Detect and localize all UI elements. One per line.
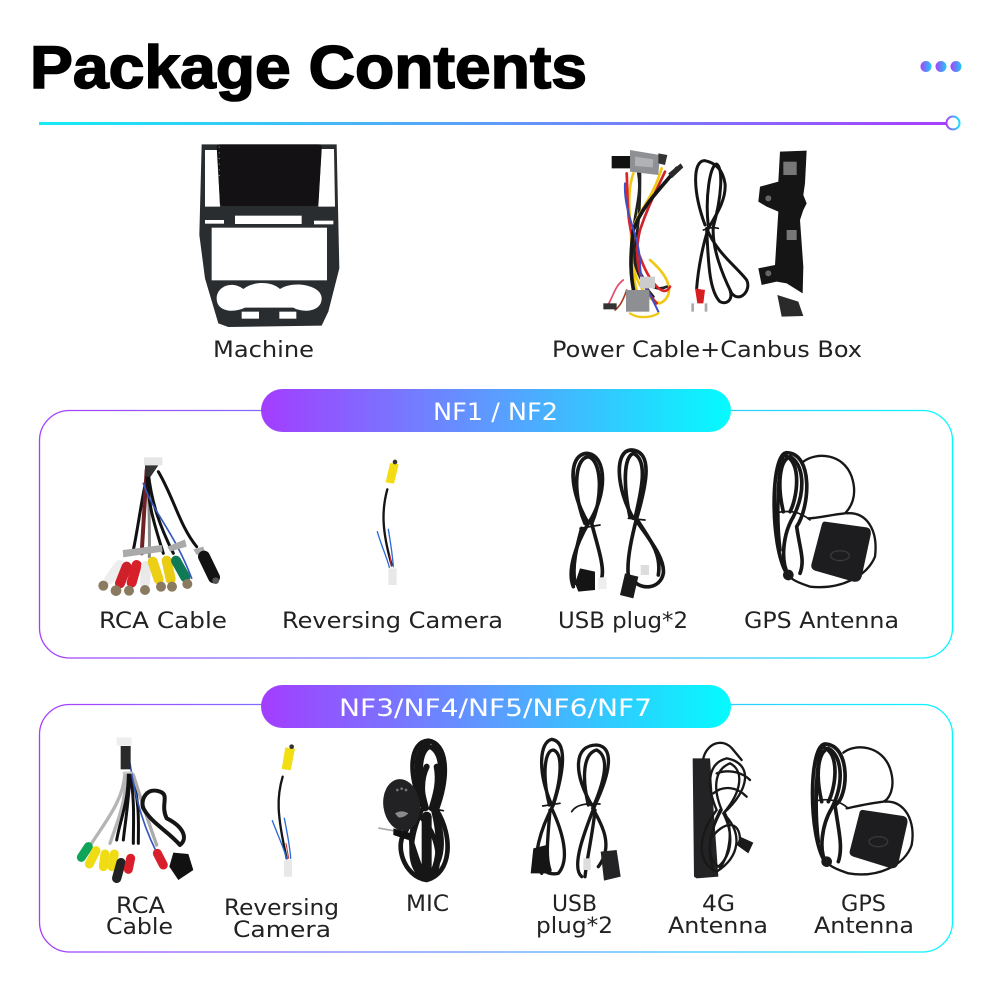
item label: RCA cable: RCA [116,894,165,919]
item label: reversing camera: Reversing [224,896,339,921]
item: RCA cable [98,457,219,596]
item: reversing camera [377,460,398,585]
item: 4G antenna [693,743,753,878]
item label: MIC: MIC [406,892,449,917]
harness wires [605,168,677,317]
item label: 4G antenna: Antenna [668,914,768,939]
item label: power cable: Power Cable+Canbus Box [552,338,862,363]
mounting bracket [758,151,807,293]
item label: reversing camera: Camera [233,918,331,943]
item: power cable, canbus box and bracket [603,150,807,317]
item: RCA cable with USB [81,737,193,880]
title: Package Contents [30,34,587,101]
item label: 4G antenna: 4G [702,892,735,917]
item label: GPS antenna [814,892,914,939]
item: microphone [378,741,448,880]
item: USB plug x2 [571,450,663,598]
item: reversing camera [272,744,294,877]
item label: GPS antenna: GPS Antenna [744,609,899,634]
item label: GPS antenna: Antenna [814,914,914,939]
rca cable loop [696,161,748,303]
panel: NF1 / NF2 [40,389,952,658]
item label: USB plug [536,892,613,939]
item: GPS antenna [812,744,913,874]
item: GPS antenna [774,453,876,587]
item label: reversing camera [224,896,339,943]
item label: reversing camera: Reversing Camera [282,609,503,634]
item label: 4G antenna [668,892,768,939]
pill heading [261,389,731,432]
pill heading: NF1 / NF2 [433,398,558,426]
item label: RCA cable [106,894,173,940]
panel: NF3/NF4/NF5/NF6/NF7 [40,685,952,952]
item label: USB plug: USB [552,892,597,917]
pill heading: NF3/NF4/NF5/NF6/NF7 [339,694,652,722]
item label: GPS antenna: GPS [841,892,886,917]
item label: USB plug: USB plug*2 [558,609,688,634]
icon: three dots [920,61,962,72]
item: machine [199,144,339,327]
item label: USB plug: plug*2 [536,914,613,939]
plugs [81,847,163,878]
header rule with ring [39,116,960,130]
item: USB plug x2 [531,739,621,881]
plugs [109,557,214,583]
item label: RCA cable: Cable [106,915,173,940]
pill heading [261,685,731,728]
item label: RCA cable: RCA Cable [99,609,227,634]
item label: machine: Machine [213,338,314,363]
